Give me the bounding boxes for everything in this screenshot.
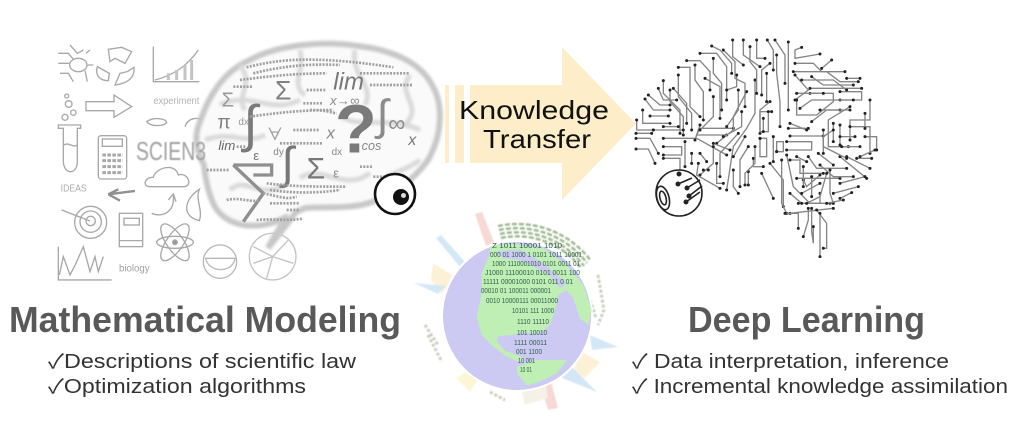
math scribbles: Σ: [222, 90, 234, 112]
math scribbles: x: [407, 132, 417, 149]
math scribbles: ε: [333, 166, 339, 180]
science doodles panel: [58, 45, 296, 280]
globe ocean: [442, 241, 592, 391]
binary digits on globe: 001 1100: [516, 349, 542, 356]
binary digits on globe: 00010 01 100011 000001: [481, 288, 551, 295]
binary digits on globe: J1000 11100010 0101 0011 100: [485, 270, 580, 277]
icon: back arrow: [108, 189, 135, 201]
symbol: sigma top: Σ: [275, 75, 291, 105]
label: IDEAS: IDEAS: [61, 184, 87, 195]
icon: curved arrow: [152, 194, 176, 215]
icon: eye: [375, 174, 415, 214]
symbols: integrals: ∫: [240, 95, 260, 153]
symbol: epsilon and text: ε: [253, 148, 259, 163]
icon: target: [62, 206, 107, 238]
math scribbles: dx: [332, 147, 342, 158]
label: biology: biology: [119, 264, 150, 275]
math scribbles: cos: [362, 139, 382, 153]
binary digits on globe: 10101 111 1000: [512, 308, 554, 315]
binary digits on globe: 1110 11110: [517, 319, 549, 326]
icon: hexagon bug: [58, 45, 93, 82]
binary digits on globe: 000 01 1000 1 0101 1011 10001: [490, 252, 582, 259]
math scribbles: x→∞: [329, 93, 360, 108]
math scribbles: ∫: [374, 92, 391, 140]
icon: calculator: [98, 136, 127, 179]
label: experiment: experiment: [153, 96, 200, 107]
symbol: for all: ∀: [267, 125, 283, 144]
arrow label: [459, 95, 609, 154]
icon: test tube: [58, 125, 81, 172]
icon: circuit eye: [654, 170, 702, 216]
binary digits on globe: 10 001: [518, 358, 535, 365]
radiating city silhouettes: [414, 212, 618, 410]
arrow label: Knowledge: [459, 95, 609, 125]
symbol: sum small: Σ: [307, 152, 325, 185]
globe continents: [477, 243, 592, 386]
math brain illustration: [136, 44, 440, 248]
arrow label: Transfer: [483, 124, 591, 154]
arrow: knowledge transfer: [445, 47, 636, 200]
icon: area chart: [153, 47, 199, 82]
circuit traces: [636, 40, 877, 257]
icon: line chart: [58, 247, 112, 280]
heading: mathematical modeling: Mathematical Modeling: [9, 299, 401, 340]
math scribbles: ∫: [279, 137, 297, 188]
binary digits on globe: 11111 00001000 0101 011 0 01: [483, 279, 573, 286]
icon: flask dish: [203, 245, 237, 278]
symbol: sum large: [233, 165, 272, 222]
list: mathematical modeling points: [48, 351, 357, 398]
list: deep learning points: [632, 351, 1008, 398]
icon: cloud: [145, 167, 189, 187]
binary digits on globe: 0010 10000111 00011000: [486, 298, 558, 305]
icon: atom: [156, 220, 194, 265]
data arcs around globe: [498, 224, 591, 268]
symbol: lim small: lim: [218, 138, 235, 153]
binary digits on globe: 10 01: [520, 367, 532, 374]
symbol: lim: lim: [333, 68, 364, 95]
icon: outline arrow: [86, 95, 132, 117]
list: mathematical modeling points: ✓Optimization algorithms: [48, 376, 306, 398]
symbol: question mark: ?: [335, 92, 377, 168]
binary digits on globe: 101 10010: [517, 330, 547, 337]
south america: [517, 360, 567, 386]
math scribbles: x: [326, 123, 336, 142]
north america: [477, 243, 592, 362]
icon: bubbles: [62, 94, 76, 120]
icon: recycle arrows: [97, 47, 134, 85]
math scribbles: [207, 60, 417, 222]
circuit brain illustration: [636, 40, 877, 257]
math scribbles: dy: [273, 147, 284, 158]
heading: deep learning: Deep Learning: [688, 299, 925, 340]
binary digits on globe: 1111 00011: [514, 340, 547, 347]
faint tick labels around globe: [425, 275, 604, 400]
binary digits on globe: 1000 1110001010 0101 0011 01: [492, 261, 580, 268]
arrow body with stripes: [445, 47, 636, 200]
icon: pie chart: [249, 233, 296, 280]
list: mathematical modeling points: ✓Descriptions of scientific law: [48, 351, 357, 373]
symbol: pi: π: [217, 113, 231, 134]
binary digits on globe: Z 1011 10001 1010: [492, 243, 562, 250]
scribble lines: [207, 60, 413, 220]
hudson bay: [495, 249, 567, 288]
label: SCIENCE: SCIEN3: [136, 136, 206, 166]
binary digits on globe: [481, 243, 582, 374]
icon: book: [119, 213, 143, 247]
symbol: infinity and x: ∞: [388, 111, 405, 138]
icon: small swirl: [147, 118, 203, 127]
list: deep learning points: ✓ Data interpretation, inference: [632, 351, 949, 373]
brain outline: [197, 44, 440, 248]
math scribbles: dx: [238, 117, 249, 128]
globe illustration: [414, 212, 618, 410]
list: deep learning points: ✓ Incremental knowledge assimilation: [632, 376, 1008, 398]
icon: leaf: [187, 189, 200, 221]
brain folds: [205, 50, 420, 190]
